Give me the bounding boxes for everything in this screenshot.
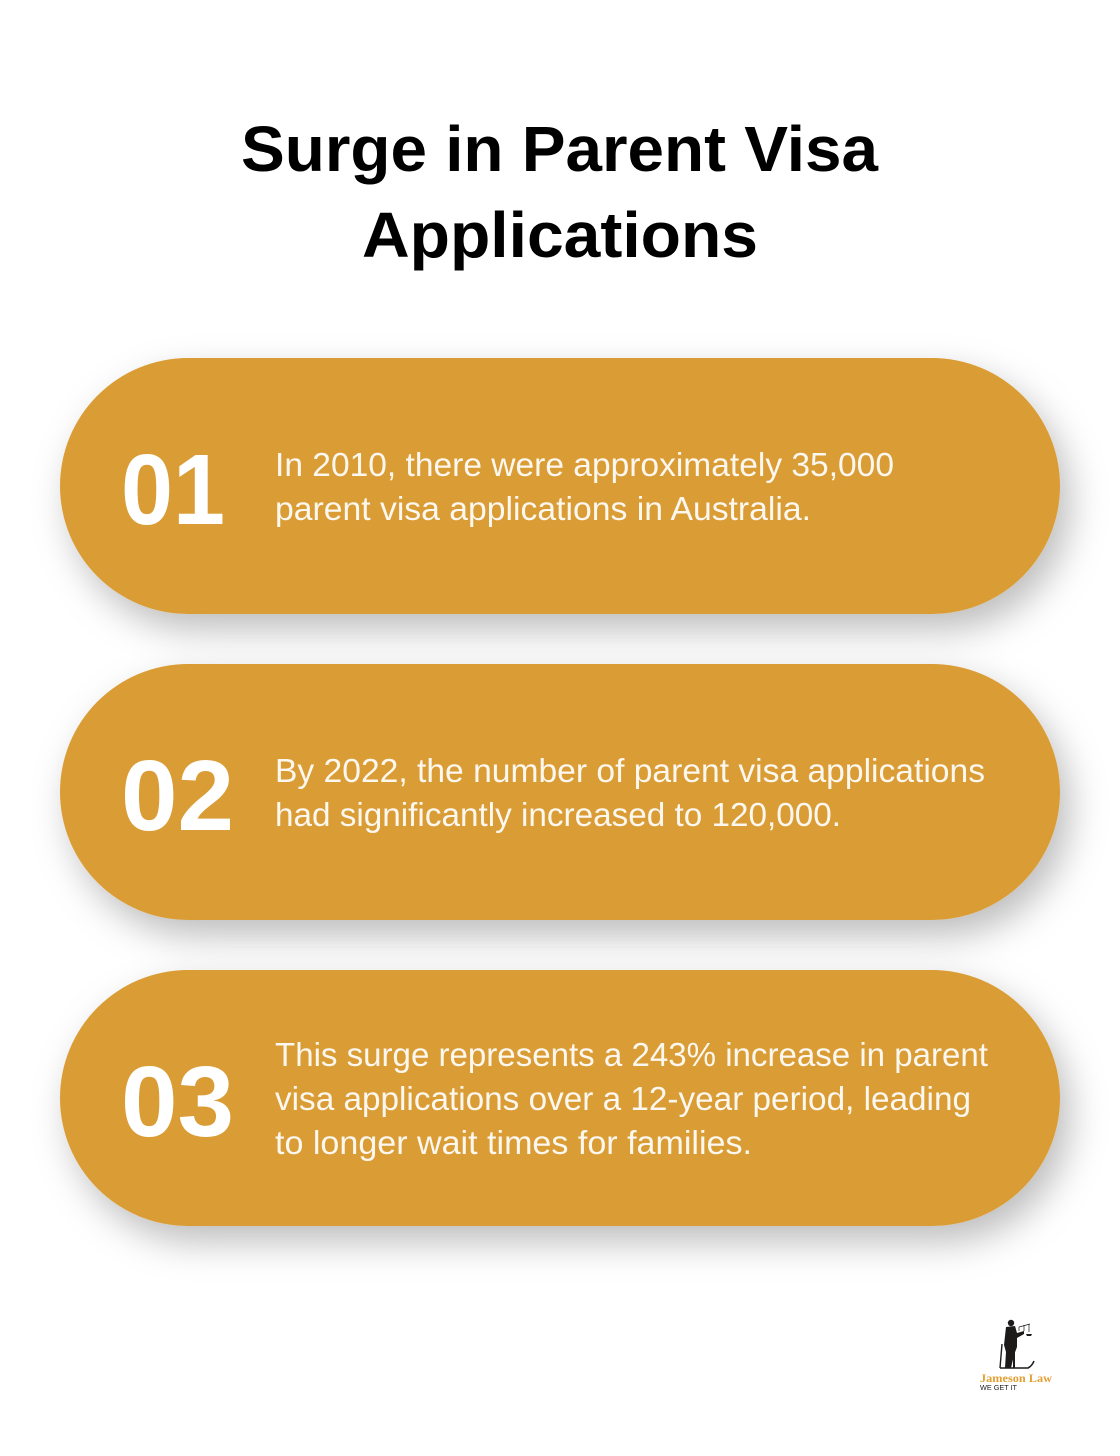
icon: lady justice with scales (1000, 1320, 1034, 1368)
number 03: 03 (121, 1046, 234, 1158)
text: step 03: visa applications over a 12-year period, leading (275, 1080, 971, 1117)
pill background 01 (60, 358, 1060, 614)
text: step 03: This surge represents a 243% increase in parent (275, 1036, 988, 1073)
text: step 01 (275, 446, 894, 527)
brand name: Jameson Law (980, 1373, 1053, 1385)
pill background 02 (60, 664, 1060, 920)
title: Applications (362, 199, 758, 271)
text: step 03 (275, 1036, 988, 1161)
title (241, 113, 878, 271)
pill background 03 (60, 970, 1060, 1226)
title: Surge in Parent Visa (241, 113, 878, 185)
text: step 02 (275, 752, 985, 833)
text: step 03: to longer wait times for families. (275, 1124, 752, 1161)
panel: step 02 (60, 664, 1060, 920)
tagline: WE GET IT (980, 1385, 1018, 1392)
panel: step 01 (60, 358, 1060, 614)
number 02: 02 (121, 740, 234, 852)
text: step 02: By 2022, the number of parent visa applications (275, 752, 985, 789)
panel: step 03 (60, 970, 1060, 1226)
text: step 01: parent visa applications in Australia. (275, 490, 811, 527)
logo: Jameson Law (980, 1320, 1053, 1392)
number 01: 01 (121, 434, 225, 546)
text: step 02: had significantly increased to 120,000. (275, 796, 841, 833)
text: step 01: In 2010, there were approximately 35,000 (275, 446, 894, 483)
